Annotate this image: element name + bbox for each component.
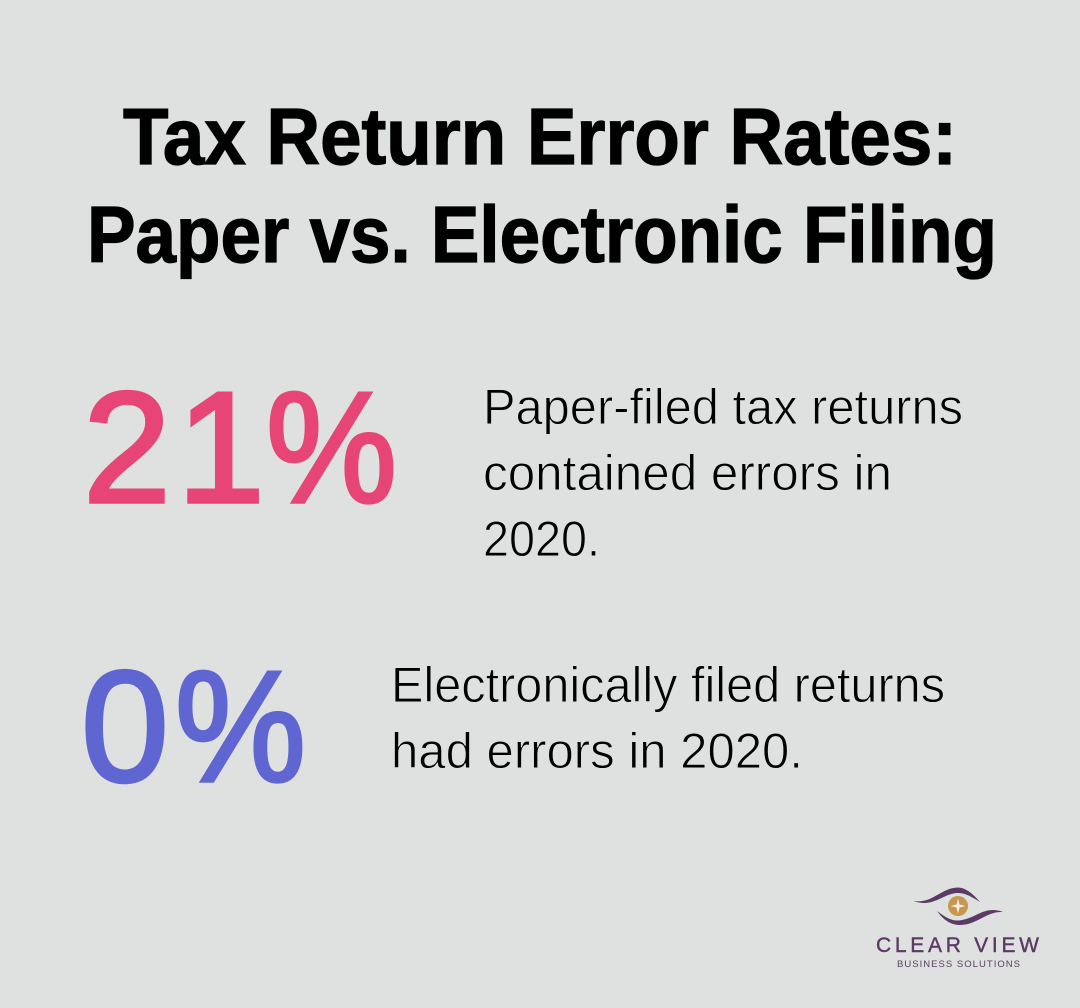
title: Paper vs. Electronic Filing — [87, 190, 997, 279]
number: 21%: % — [266, 360, 397, 536]
description: paper-filed returns: 2020. — [483, 510, 600, 567]
number: 0%: % — [175, 639, 306, 815]
description: paper-filed returns — [483, 378, 963, 567]
number: 21%: 2 — [83, 360, 171, 536]
number: 0%: 0 — [81, 639, 169, 815]
title: Tax Return Error Rates: — [123, 92, 957, 181]
logo: Clear View Business Solutions — [876, 888, 1039, 970]
description: electronically filed returns: Electronically filed returns — [391, 656, 945, 713]
icon: eye — [913, 888, 1003, 925]
description: paper-filed returns: Paper-filed tax returns — [483, 378, 963, 435]
description: electronically filed returns: had errors in 2020. — [391, 722, 803, 779]
wordmark: CLEAR VIEW — [876, 934, 1039, 957]
title — [87, 92, 997, 279]
description: electronically filed returns — [391, 656, 945, 779]
description: paper-filed returns: contained errors in — [483, 444, 892, 501]
tagline: BUSINESS SOLUTIONS — [897, 959, 1020, 970]
stat: 0% electronic — [81, 639, 945, 815]
stat: 21% paper-filed — [83, 360, 963, 567]
number: 21%: 1 — [177, 360, 265, 536]
